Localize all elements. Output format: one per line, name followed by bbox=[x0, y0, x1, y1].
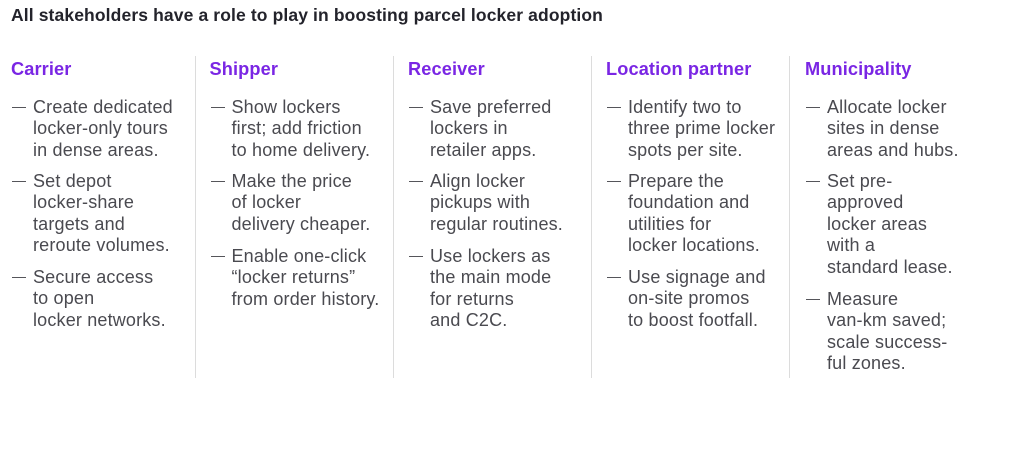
action: depot targets: Set depot bbox=[33, 170, 112, 190]
action: align pickups: pickups with bbox=[430, 192, 530, 212]
action: allocate sites bbox=[806, 96, 959, 160]
action: allocate sites: sites in dense bbox=[827, 118, 939, 138]
action: measure van-km: van-km saved; bbox=[827, 310, 946, 330]
action: open networks bbox=[12, 266, 166, 330]
heading: location partner: Location partner bbox=[606, 59, 751, 79]
action: open networks: to open bbox=[33, 288, 94, 308]
action: open networks: locker networks. bbox=[33, 310, 166, 330]
action: foundation and utilities: Prepare the bbox=[628, 170, 724, 190]
action: open networks: Secure access bbox=[33, 266, 153, 286]
action: dedicated tours: locker-only tours bbox=[33, 118, 168, 138]
action: pre-approved areas: Set pre- bbox=[827, 170, 892, 190]
action: depot targets: targets and bbox=[33, 214, 125, 234]
action: locker returns: “locker returns” bbox=[232, 267, 355, 287]
action: depot targets: locker-share bbox=[33, 192, 134, 212]
action: pre-approved areas: locker areas bbox=[827, 214, 927, 234]
action: measure van-km: Measure bbox=[827, 288, 898, 308]
action: cheaper price: Make the price bbox=[232, 170, 352, 190]
action: show lockers first bbox=[211, 96, 370, 160]
action: show lockers first: first; add friction bbox=[232, 118, 362, 138]
action: foundation and utilities: foundation and bbox=[628, 192, 750, 212]
action: cheaper price: delivery cheaper. bbox=[232, 214, 370, 234]
action: pre-approved areas: standard lease. bbox=[827, 257, 953, 277]
action: allocate sites: areas and hubs. bbox=[827, 140, 959, 160]
action: save lockers: retailer apps. bbox=[430, 140, 536, 160]
action: foundation and utilities bbox=[607, 170, 760, 255]
panel: shipper bbox=[210, 59, 379, 309]
action: locker returns bbox=[211, 246, 379, 309]
heading: municipality: Municipality bbox=[805, 59, 912, 79]
panel: location partner bbox=[606, 59, 775, 330]
heading: receiver: Receiver bbox=[408, 59, 485, 79]
action: prime spots bbox=[607, 96, 775, 160]
action: dedicated tours: in dense areas. bbox=[33, 140, 159, 160]
action: measure van-km bbox=[806, 288, 947, 373]
action: foundation and utilities: locker locations. bbox=[628, 235, 760, 255]
action: dedicated tours: Create dedicated bbox=[33, 96, 173, 116]
heading: shipper: Shipper bbox=[210, 59, 278, 79]
action: foundation and utilities: utilities for bbox=[628, 214, 711, 234]
action: align pickups bbox=[409, 170, 563, 234]
action: measure van-km: ful zones. bbox=[827, 353, 906, 373]
action: show lockers first: Show lockers bbox=[232, 96, 341, 116]
action: align pickups: Align locker bbox=[430, 170, 525, 190]
action: returns and C2C bbox=[409, 246, 551, 330]
action: prime spots: Identify two to bbox=[628, 96, 742, 116]
action: depot targets bbox=[12, 170, 170, 255]
title: All stakeholders have a role to play in boosting parcel locker adoption bbox=[11, 5, 603, 25]
action: align pickups: regular routines. bbox=[430, 214, 563, 234]
action: show lockers first: to home delivery. bbox=[232, 140, 370, 160]
action: cheaper price bbox=[211, 170, 370, 234]
action: signage and promos: to boost footfall. bbox=[628, 310, 758, 330]
action: locker returns: Enable one-click bbox=[232, 246, 366, 266]
action: cheaper price: of locker bbox=[232, 192, 301, 212]
panel: municipality bbox=[805, 59, 959, 373]
action: pre-approved areas: approved bbox=[827, 192, 903, 212]
action: dedicated tours bbox=[12, 96, 173, 160]
action: save lockers: Save preferred bbox=[430, 96, 551, 116]
action: save lockers bbox=[409, 96, 551, 160]
action: signage and promos: on-site promos bbox=[628, 288, 749, 308]
heading: carrier: Carrier bbox=[11, 59, 72, 79]
action: prime spots: spots per site. bbox=[628, 140, 743, 160]
panel: carrier bbox=[11, 59, 173, 330]
action: depot targets: reroute volumes. bbox=[33, 235, 170, 255]
action: signage and promos bbox=[607, 266, 766, 330]
action: locker returns: from order history. bbox=[232, 289, 379, 309]
action: signage and promos: Use signage and bbox=[628, 266, 766, 286]
action: returns and C2C: and C2C. bbox=[430, 310, 507, 330]
action: pre-approved areas: with a bbox=[827, 235, 875, 255]
action: pre-approved areas bbox=[806, 170, 953, 277]
action: measure van-km: scale success- bbox=[827, 332, 947, 352]
action: allocate sites: Allocate locker bbox=[827, 96, 947, 116]
action: returns and C2C: the main mode bbox=[430, 267, 551, 287]
panel: receiver bbox=[408, 59, 563, 330]
action: prime spots: three prime locker bbox=[628, 118, 775, 138]
action: returns and C2C: Use lockers as bbox=[430, 246, 550, 266]
action: returns and C2C: for returns bbox=[430, 289, 514, 309]
action: save lockers: lockers in bbox=[430, 118, 508, 138]
